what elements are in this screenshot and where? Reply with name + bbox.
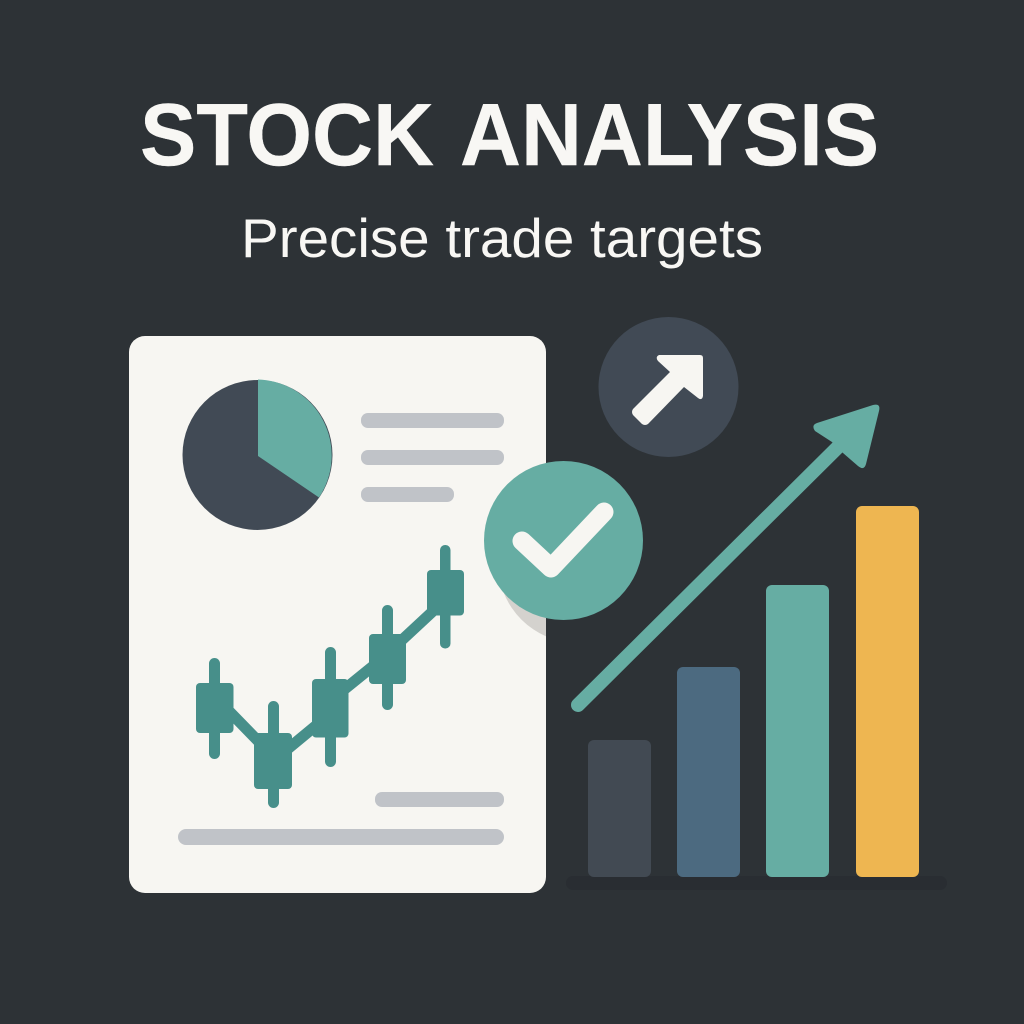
text lines bottom	[178, 792, 504, 845]
icon: arrow badge	[598, 317, 738, 457]
text lines top	[361, 413, 504, 502]
icon: check badge	[484, 461, 643, 620]
title: ANALYSIS	[460, 85, 879, 184]
baseline shadow	[566, 876, 947, 890]
title: STOCK	[140, 85, 434, 184]
growth arrow	[578, 405, 879, 705]
pie chart	[182, 380, 332, 530]
candlestick chart	[196, 545, 464, 808]
subtitle: Precise trade targets	[241, 207, 763, 269]
title	[140, 85, 879, 184]
panel: report document	[129, 336, 546, 893]
check badge shadow	[504, 593, 546, 636]
bar chart	[566, 506, 947, 890]
